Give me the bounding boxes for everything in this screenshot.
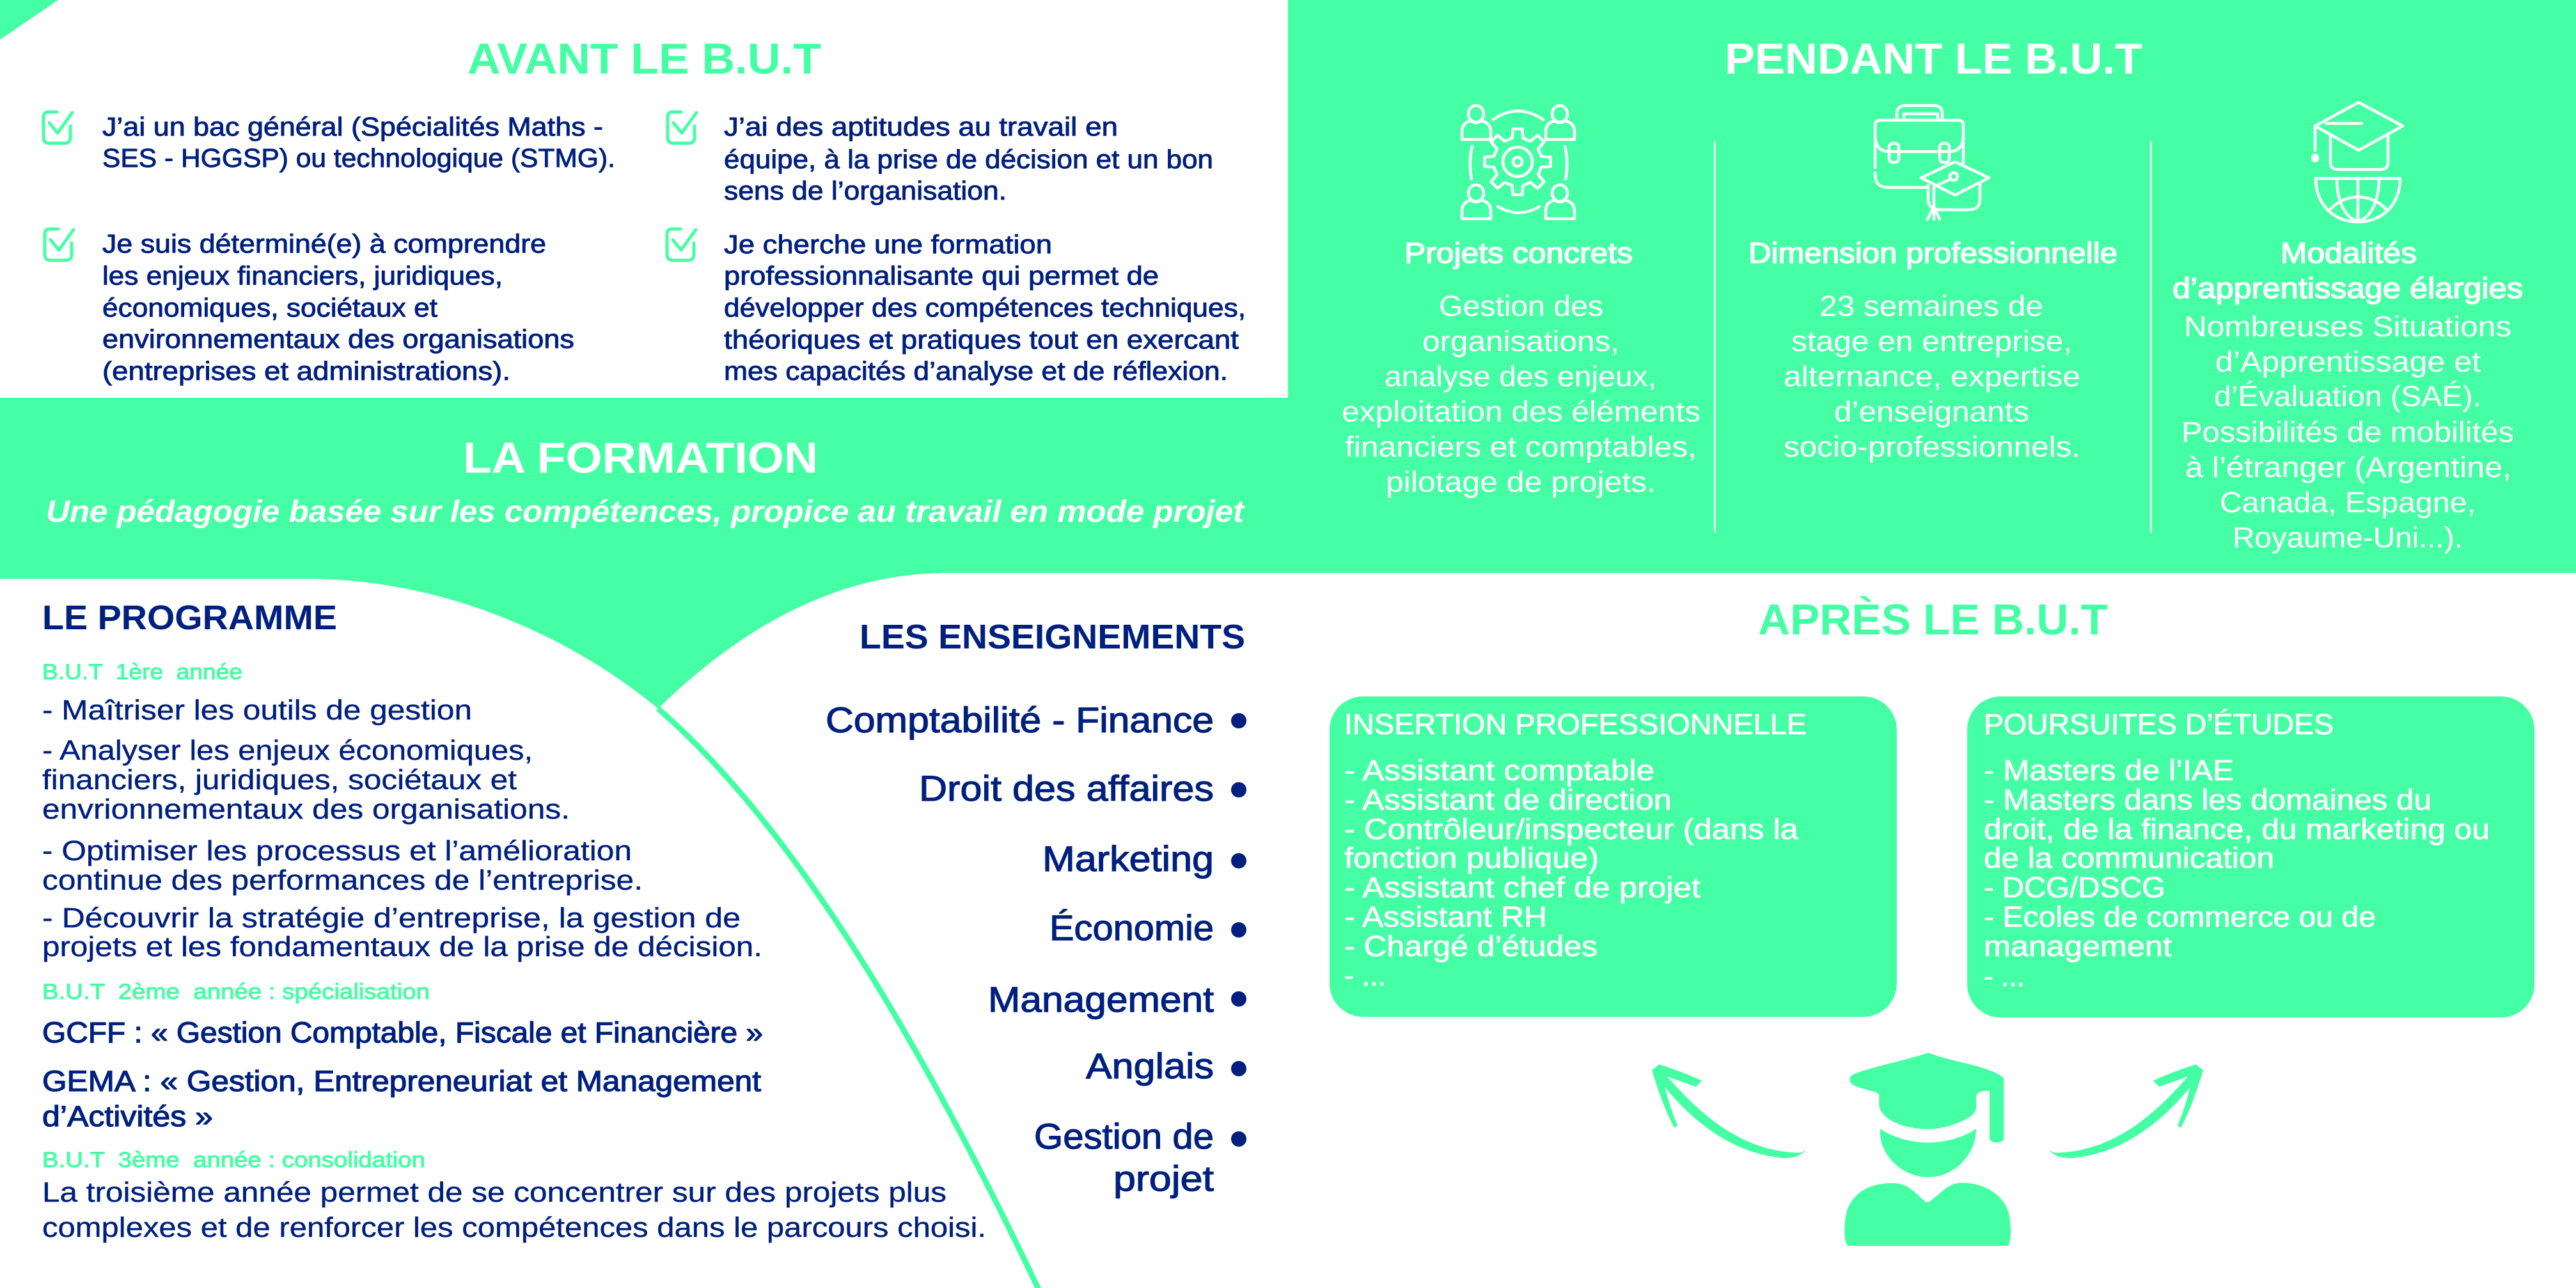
list: enseignements: Économie	[1049, 907, 1214, 948]
text: déterminé: environnementaux des organisations	[102, 324, 574, 354]
column: modalités: d’Évaluation (SAÉ).	[2214, 380, 2481, 412]
heading: la formation: LA FORMATION	[463, 434, 818, 482]
card: poursuites d'études: droit, de la finance, du marketing ou	[1984, 813, 2490, 845]
card: poursuites d'études	[1967, 696, 2534, 1017]
text: bac: SES - HGGSP) ou technologique (STMG).	[102, 143, 615, 173]
green band with curved wedge	[0, 398, 1288, 709]
list: enseignements	[826, 700, 1214, 1198]
text: formation professionnalisante	[724, 230, 1246, 386]
column: projets concrets: analyse des enjeux,	[1385, 360, 1656, 393]
card: insertion professionnelle: - Contrôleur/inspecteur (dans la	[1344, 813, 1799, 845]
heading: les enseignements: LES ENSEIGNEMENTS	[860, 618, 1245, 656]
text: spécialisations: GEMA : « Gestion, Entrepreneuriat et Management	[42, 1065, 762, 1097]
column: projets concrets	[1342, 237, 1700, 498]
column: dimension professionnelle: Dimension professionnelle	[1748, 237, 2117, 269]
text: programme 1ère année: projets et les fondamentaux de la prise de décision.	[42, 931, 762, 962]
column: modalités: Possibilités de mobilités	[2181, 416, 2514, 448]
card: poursuites d'études: - ...	[1984, 960, 2025, 993]
column: projets concrets: Gestion des	[1439, 290, 1603, 322]
list: enseignements: Gestion de	[1034, 1116, 1214, 1156]
text: programme 1ère année: financiers, juridiques, sociétaux et	[42, 764, 517, 796]
text: troisième année: complexes et de renforcer les compétences dans le parcours choisi.	[42, 1212, 986, 1243]
card: insertion professionnelle: - Assistant de direction	[1344, 783, 1672, 816]
card: insertion professionnelle: fonction publique)	[1344, 842, 1599, 874]
card: poursuites d'études: management	[1984, 930, 2172, 962]
panel: après le B.U.T	[1330, 595, 2534, 1246]
text: programme 1ère année: - Maîtriser les outils de gestion	[42, 695, 472, 726]
text: troisième année: La troisième année permet de se concentrer sur des projets plus	[42, 1177, 946, 1208]
card: insertion professionnelle	[1330, 696, 1897, 1017]
text: programme 1ère année: continue des performances de l’entreprise.	[42, 865, 643, 896]
icon: cap and globe	[2313, 102, 2403, 222]
column: dimension professionnelle: alternance, expertise	[1784, 360, 2080, 393]
column: projets concrets: exploitation des éléments	[1342, 395, 1700, 428]
panel: avant le B.U.T	[43, 35, 1246, 386]
bullets	[1231, 713, 1246, 1147]
list: enseignements: Droit des affaires	[919, 768, 1214, 808]
list: enseignements: Marketing	[1042, 838, 1214, 879]
text: déterminé: économiques, sociétaux et	[102, 293, 438, 322]
graduate: body	[1844, 1183, 2011, 1246]
card: poursuites d'études: - DCG/DSCG	[1984, 871, 2165, 904]
label: 1ère année: B.U.T 1ère année	[42, 660, 242, 684]
list: enseignements: projet	[1113, 1158, 1214, 1198]
column: dimension professionnelle	[1748, 237, 2117, 463]
icon: checkbox 3	[668, 112, 696, 143]
text: programme 1ère année: - Analyser les enjeux économiques,	[42, 735, 533, 766]
card: poursuites d'études: POURSUITES D’ÉTUDES	[1984, 708, 2334, 741]
text: formation professionnalisante: Je cherche une formation	[724, 230, 1052, 259]
text: formation professionnalisante: développer des compétences techniques,	[724, 293, 1246, 322]
column: dimension professionnelle: stage en entreprise,	[1791, 325, 2072, 357]
heading: pendant le B.U.T: PENDANT LE B.U.T	[1725, 35, 2142, 83]
panel: les enseignements	[826, 618, 1246, 1198]
column: modalités: Canada, Espagne,	[2220, 486, 2476, 519]
icon: checkbox 2	[45, 229, 74, 260]
panel: pendant le B.U.T	[1342, 35, 2523, 554]
text: déterminé	[102, 229, 574, 386]
icon: graduate with arrows	[1652, 1053, 2203, 1246]
text: programme 1ère année: - Découvrir la stratégie d’entreprise, la gestion de	[42, 902, 741, 934]
panel: pendant background	[1288, 0, 2576, 573]
curved green line	[658, 709, 1039, 1288]
text: aptitudes	[724, 112, 1213, 205]
list: enseignements: Anglais	[1086, 1046, 1214, 1086]
card: insertion professionnelle: - Assistant chef de projet	[1344, 871, 1701, 904]
heading: après le B.U.T: APRÈS LE B.U.T	[1758, 595, 2108, 644]
column: modalités	[2172, 237, 2523, 554]
text: programme 1ère année: envrionnementaux des organisations.	[42, 794, 570, 825]
list: enseignements: Management	[988, 979, 1214, 1019]
text: spécialisations	[42, 1016, 763, 1133]
text: aptitudes: sens de l’organisation.	[724, 176, 1007, 205]
heading: avant le B.U.T: AVANT LE B.U.T	[467, 35, 821, 83]
column: modalités: à l’étranger (Argentine,	[2185, 451, 2511, 483]
column: projets concrets: financiers et comptables,	[1345, 430, 1697, 463]
card: insertion professionnelle: INSERTION PROFESSIONNELLE	[1344, 708, 1807, 741]
text: formation professionnalisante: professionnalisante qui permet de	[724, 261, 1159, 290]
graduate: cap	[1850, 1053, 2004, 1142]
text: spécialisations: d’Activités »	[42, 1100, 213, 1133]
column: dimension professionnelle: socio-professionnels.	[1784, 430, 2080, 463]
arrow: left	[1652, 1064, 1806, 1158]
text: aptitudes: J’ai des aptitudes au travail en	[724, 112, 1118, 141]
text: formation professionnalisante: mes capacités d’analyse et de réflexion.	[724, 356, 1228, 386]
icon: people and gear	[1462, 106, 1575, 219]
text: déterminé: (entreprises et administrations).	[102, 356, 510, 386]
card: poursuites d'études: - Masters dans les domaines du	[1984, 783, 2431, 816]
text: bac	[102, 112, 615, 173]
text: déterminé: Je suis déterminé(e) à comprendre	[102, 229, 546, 258]
text: déterminé: les enjeux financiers, juridiques,	[102, 261, 503, 290]
text: programme 1ère année: - Optimiser les processus et l’amélioration	[42, 835, 632, 867]
text: troisième année	[42, 1177, 986, 1243]
text: bac: J’ai un bac général (Spécialités Maths -	[102, 112, 603, 141]
card: poursuites d'études: - Ecoles de commerce ou de	[1984, 900, 2376, 933]
icon: briefcase with cap	[1875, 106, 1989, 219]
text: spécialisations: GCFF : « Gestion Comptable, Fiscale et Financière »	[42, 1016, 763, 1049]
column: projets concrets: organisations,	[1422, 325, 1619, 357]
card: insertion professionnelle: - Assistant comptable	[1344, 754, 1654, 787]
card: insertion professionnelle: - ...	[1344, 959, 1386, 992]
card: poursuites d'études: de la communication	[1984, 842, 2274, 874]
label: 3ème année: B.U.T 3ème année : consolidation	[42, 1148, 425, 1172]
card: insertion professionnelle: - Assistant RH	[1344, 900, 1547, 933]
text: formation professionnalisante: théoriques et pratiques tout en exercant	[724, 325, 1239, 354]
icon: checkbox 4	[667, 229, 696, 260]
graduate: face	[1880, 1129, 1976, 1177]
list: enseignements: Comptabilité - Finance	[826, 700, 1214, 740]
label: 2ème année: B.U.T 2ème année : spécialisation	[42, 980, 430, 1004]
panel: le programme	[42, 599, 986, 1243]
column: projets concrets: pilotage de projets.	[1386, 466, 1656, 498]
column: projets concrets: Projets concrets	[1404, 237, 1633, 269]
text: aptitudes: équipe, à la prise de décision et un bon	[724, 145, 1213, 174]
divider 1	[1714, 141, 1715, 533]
column: dimension professionnelle: d’enseignants	[1834, 395, 2029, 428]
column: modalités: Royaume-Uni...).	[2233, 521, 2463, 554]
column: dimension professionnelle: 23 semaines de	[1819, 290, 2043, 322]
divider 2	[2150, 141, 2151, 533]
card: insertion professionnelle: - Chargé d’études	[1344, 930, 1598, 962]
heading: le programme: LE PROGRAMME	[42, 599, 337, 637]
corner triangle	[0, 0, 58, 40]
card: poursuites d'études: - Masters de l’IAE	[1984, 754, 2234, 787]
column: modalités: Modalités	[2281, 237, 2417, 269]
subtitle: pédagogie: Une pédagogie basée sur les compétences, propice au travail en mode projet	[46, 495, 1245, 529]
icon: checkbox 1	[43, 112, 72, 143]
column: modalités: d’apprentissage élargies	[2172, 272, 2523, 304]
text: programme 1ère année	[42, 695, 762, 962]
arrow: right	[2049, 1064, 2203, 1158]
column: modalités: Nombreuses Situations	[2184, 310, 2511, 343]
column: modalités: d’Apprentissage et	[2215, 345, 2481, 378]
